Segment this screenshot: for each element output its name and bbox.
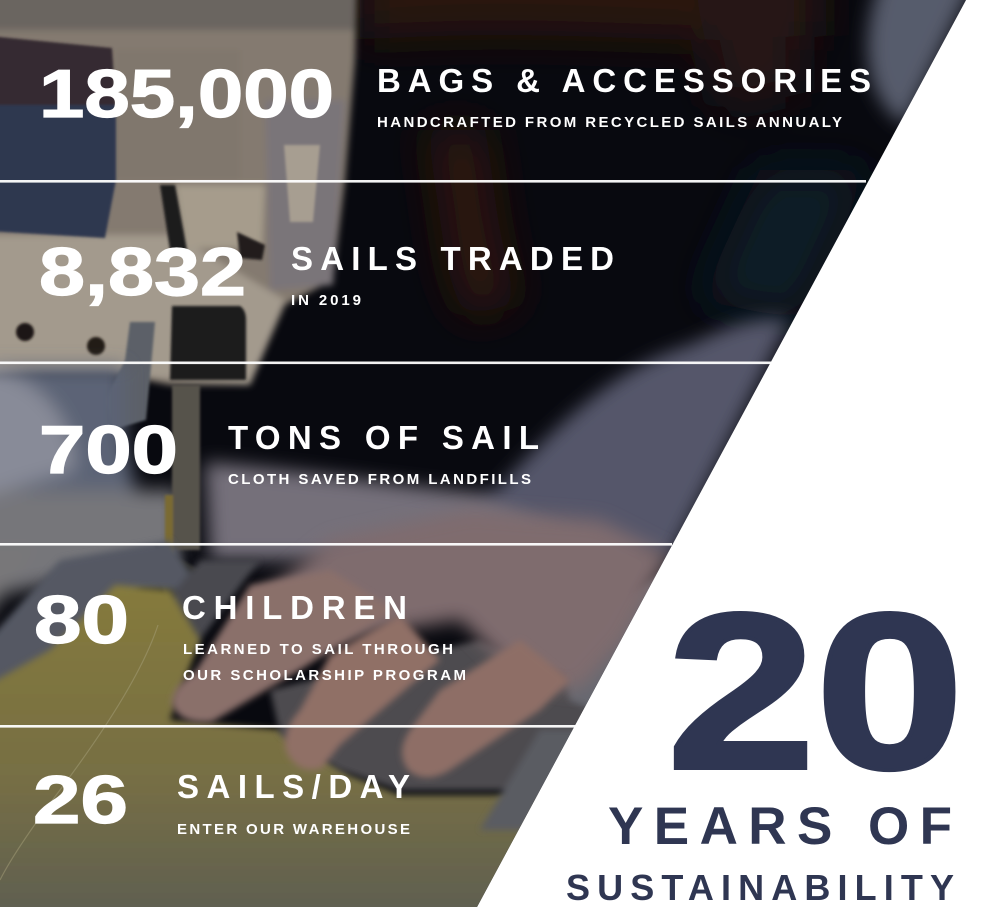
stat row: 80 children: OUR SCHOLARSHIP PROGRAM [183, 667, 466, 684]
stat row: 26 sails per day: 26 [33, 762, 128, 838]
stat row: 8,832 sails traded: IN 2019 [291, 292, 361, 309]
stat row: 26 sails per day: SAILS/DAY [177, 768, 410, 805]
stat row: 80 children: LEARNED TO SAIL THROUGH [183, 641, 453, 658]
stat row: 185,000 bags and accessories: 185,000 [39, 56, 334, 132]
stat row: 700 tons of sail: CLOTH SAVED FROM LANDFILLS [228, 471, 531, 488]
stat row: 185,000 bags and accessories: HANDCRAFTED FROM RECYCLED SAILS ANNUALY [377, 114, 842, 131]
headline: 20 years of sustainability [566, 568, 964, 908]
headline: 20 years of sustainability: SUSTAINABILITY [566, 867, 954, 908]
stat row: 26 sails per day: ENTER OUR WAREHOUSE [177, 821, 410, 838]
stat row: 80 children: 80 [34, 582, 129, 658]
row dividers [0, 180, 866, 728]
photo: blurred garment in background [360, 0, 870, 320]
photo: dark panel and machine details [0, 34, 320, 430]
photo: mesh below hand [270, 560, 680, 830]
stat row: 8,832 sails traded: 8,832 [39, 234, 246, 310]
photo: fingers [172, 570, 570, 778]
stat row: 185,000 bags and accessories: BAGS & ACCESSORIES [377, 62, 871, 99]
stat row: 8,832 sails traded: SAILS TRADED [291, 240, 614, 277]
stat row: 80 children [34, 582, 466, 684]
photo: sewing machine body [0, 0, 357, 385]
stat row: 700 tons of sail: TONS OF SAIL [228, 419, 539, 456]
stat row: 80 children: CHILDREN [182, 589, 407, 626]
photo: needle column [164, 385, 202, 592]
photo: cloth left area [0, 366, 180, 640]
stat row: 700 tons of sail [39, 412, 539, 488]
photo: stitch thread [0, 625, 158, 880]
photo: blurred forearm at right [205, 0, 980, 560]
headline: 20 years of sustainability: YEARS OF [608, 797, 952, 856]
stat row: 700 tons of sail: 700 [39, 412, 178, 488]
stat row: 185,000 bags and accessories [39, 56, 871, 132]
stat row: 26 sails per day [33, 762, 410, 838]
photo: sail mesh [0, 538, 258, 682]
photo: back of hand [255, 510, 670, 690]
headline: 20 years of sustainability: 20 [667, 568, 964, 816]
stat row: 8,832 sails traded [39, 234, 614, 310]
photo: yellow sail fabric [0, 585, 545, 920]
